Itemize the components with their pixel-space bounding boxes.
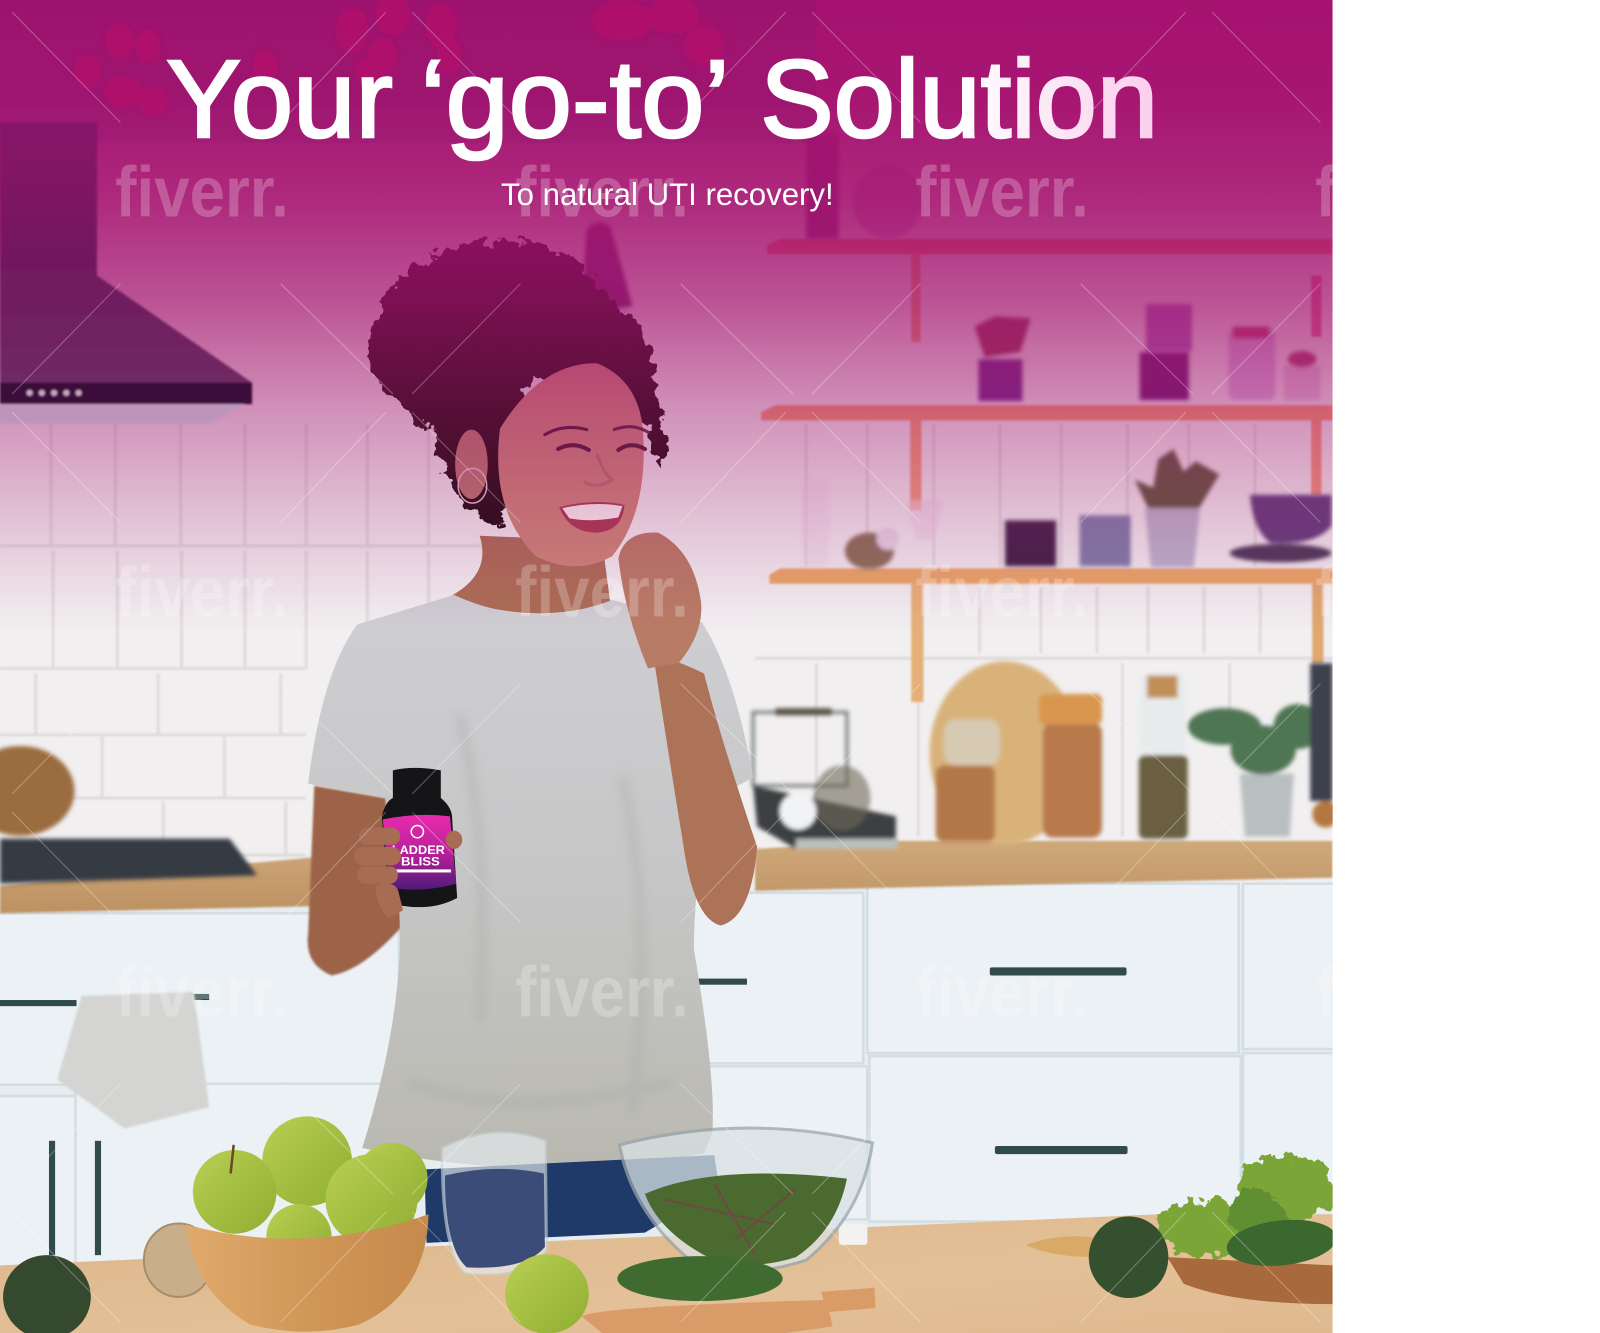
lettuce: [1157, 1156, 1337, 1256]
fiverr watermarks: fiverr.: [1315, 152, 1489, 232]
salad bowl: [619, 1128, 872, 1271]
magenta gradient overlay: [0, 0, 1333, 633]
foreground table: [0, 1214, 1333, 1333]
t-shirt: [308, 595, 753, 1168]
right cucumber: [1224, 1215, 1339, 1271]
supplement bottle: BLISS: [401, 854, 440, 868]
range hood: [0, 122, 252, 423]
left avocado: [3, 1255, 91, 1333]
cabinet handles: [0, 967, 1128, 1255]
face: [498, 363, 644, 566]
supplement bottle: LADDER: [392, 843, 445, 857]
fiverr watermarks: fiverr.: [515, 152, 689, 232]
ear and earring: [455, 430, 488, 499]
wooden plate: [1167, 1257, 1333, 1304]
hair: [365, 240, 664, 529]
subtitle: To natural UTI recovery!: [501, 176, 834, 212]
wall tiles: [0, 423, 1333, 855]
fiverr watermarks: fiverr.: [915, 152, 1089, 232]
water glass: [442, 1132, 547, 1275]
title: Your: [166, 38, 393, 161]
nose shadow: [584, 454, 612, 485]
woven basket: [144, 1223, 213, 1297]
shirt folds: [458, 718, 637, 860]
counter top: [0, 841, 1333, 913]
neck: [451, 536, 610, 613]
woman: [308, 240, 757, 1243]
counter items: [0, 661, 1339, 884]
shelf items: [584, 133, 1332, 569]
apples in wooden bowl: [186, 1116, 429, 1332]
fiverr watermarks: fiverr.: [915, 952, 1089, 1032]
fiverr watermarks: fiverr.: [1315, 952, 1489, 1032]
fiverr watermarks: fiverr.: [915, 552, 1089, 632]
lone apple: [505, 1254, 589, 1333]
raised hand: [618, 533, 701, 668]
left arm: [308, 786, 413, 976]
wall shelves: [761, 239, 1333, 702]
right avocado: [1089, 1216, 1168, 1298]
jeans: [424, 1155, 719, 1243]
supplement bottle: [382, 768, 457, 907]
title: Solution: [760, 38, 1158, 161]
fiverr watermarks: fiverr.: [515, 952, 689, 1032]
cutting board and cucumber: [582, 1256, 876, 1333]
fiverr watermarks: fiverr.: [115, 952, 289, 1032]
fiverr watermarks: fiverr.: [515, 552, 689, 632]
cabinet fronts: [0, 888, 1333, 1276]
wooden spoon: [1026, 1236, 1097, 1257]
brows and eyes: [545, 427, 649, 450]
kitchen wall: [0, 383, 1332, 888]
fiverr watermarks: fiverr.: [115, 152, 289, 232]
smile: [559, 502, 624, 533]
title: [166, 38, 1158, 161]
fiverr watermarks: fiverr.: [1315, 552, 1489, 632]
title: ‘go-to’: [420, 38, 730, 161]
back counter and cabinets: [0, 841, 1335, 1276]
right arm: [653, 653, 757, 926]
berry foliage: [73, 0, 724, 117]
hand holding bottle: [354, 828, 462, 918]
fiverr watermarks: fiverr.: [115, 552, 289, 632]
fiverr watermarks: [115, 152, 1489, 1032]
dark band behind berries: [0, 0, 816, 143]
towel: [57, 992, 209, 1129]
